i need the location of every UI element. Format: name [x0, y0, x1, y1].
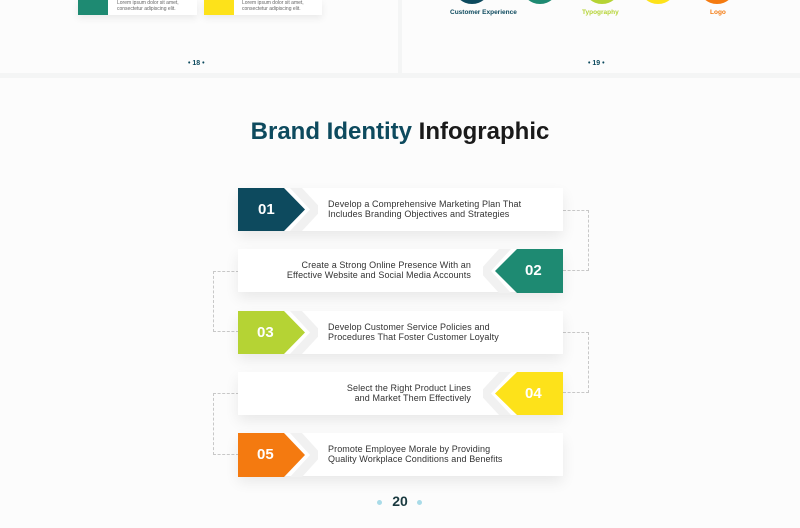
panel: slide 19 — [402, 0, 800, 73]
step 05: Promote Employee Morale by Providing — [328, 444, 490, 454]
step 05 — [238, 433, 563, 476]
card: green icon: consectetur adipiscing elit. — [117, 6, 176, 12]
connectors — [213, 210, 589, 455]
step 04 — [238, 372, 563, 415]
panel: slide 18 — [0, 0, 398, 73]
step 01: Develop a Comprehensive Marketing Plan That — [328, 199, 521, 209]
page number 20 — [377, 493, 422, 509]
panel: slide 19: Typography — [582, 9, 619, 16]
step 03 — [238, 311, 563, 354]
card: yellow icon: Lorem ipsum dolor sit amet, — [242, 0, 304, 6]
step 03: Procedures That Foster Customer Loyalty — [328, 332, 499, 342]
step 05: Quality Workplace Conditions and Benefits — [328, 454, 503, 464]
card: yellow icon — [204, 0, 322, 15]
step 02: Effective Website and Social Media Accounts — [287, 270, 471, 280]
step 01 — [238, 188, 563, 231]
step 04: and Market Them Effectively — [355, 393, 471, 403]
step 03: Develop Customer Service Policies and — [328, 322, 490, 332]
page number 18: • 18 • — [188, 60, 205, 67]
circles — [460, 0, 728, 4]
card: yellow icon: consectetur adipiscing elit. — [242, 6, 301, 12]
step 02: Create a Strong Online Presence With an — [302, 260, 471, 270]
step 03: 03 — [257, 324, 274, 341]
step 04: Select the Right Product Lines — [347, 383, 471, 393]
step 02 — [238, 249, 563, 292]
step 05: 05 — [257, 446, 274, 463]
step 01: Includes Branding Objectives and Strategies — [328, 209, 509, 219]
page number 20: 20 — [392, 493, 408, 509]
step 02: 02 — [525, 262, 542, 279]
step 04: 04 — [525, 385, 542, 402]
card: green icon: Lorem ipsum dolor sit amet, — [117, 0, 179, 6]
card: green icon — [78, 0, 197, 15]
page number 19: • 19 • — [588, 60, 605, 67]
step 01: 01 — [258, 201, 275, 218]
labels: Customer Experience — [450, 9, 517, 16]
title: Brand Identity Infographic — [251, 118, 549, 145]
panel: slide 19: Logo — [710, 9, 726, 16]
